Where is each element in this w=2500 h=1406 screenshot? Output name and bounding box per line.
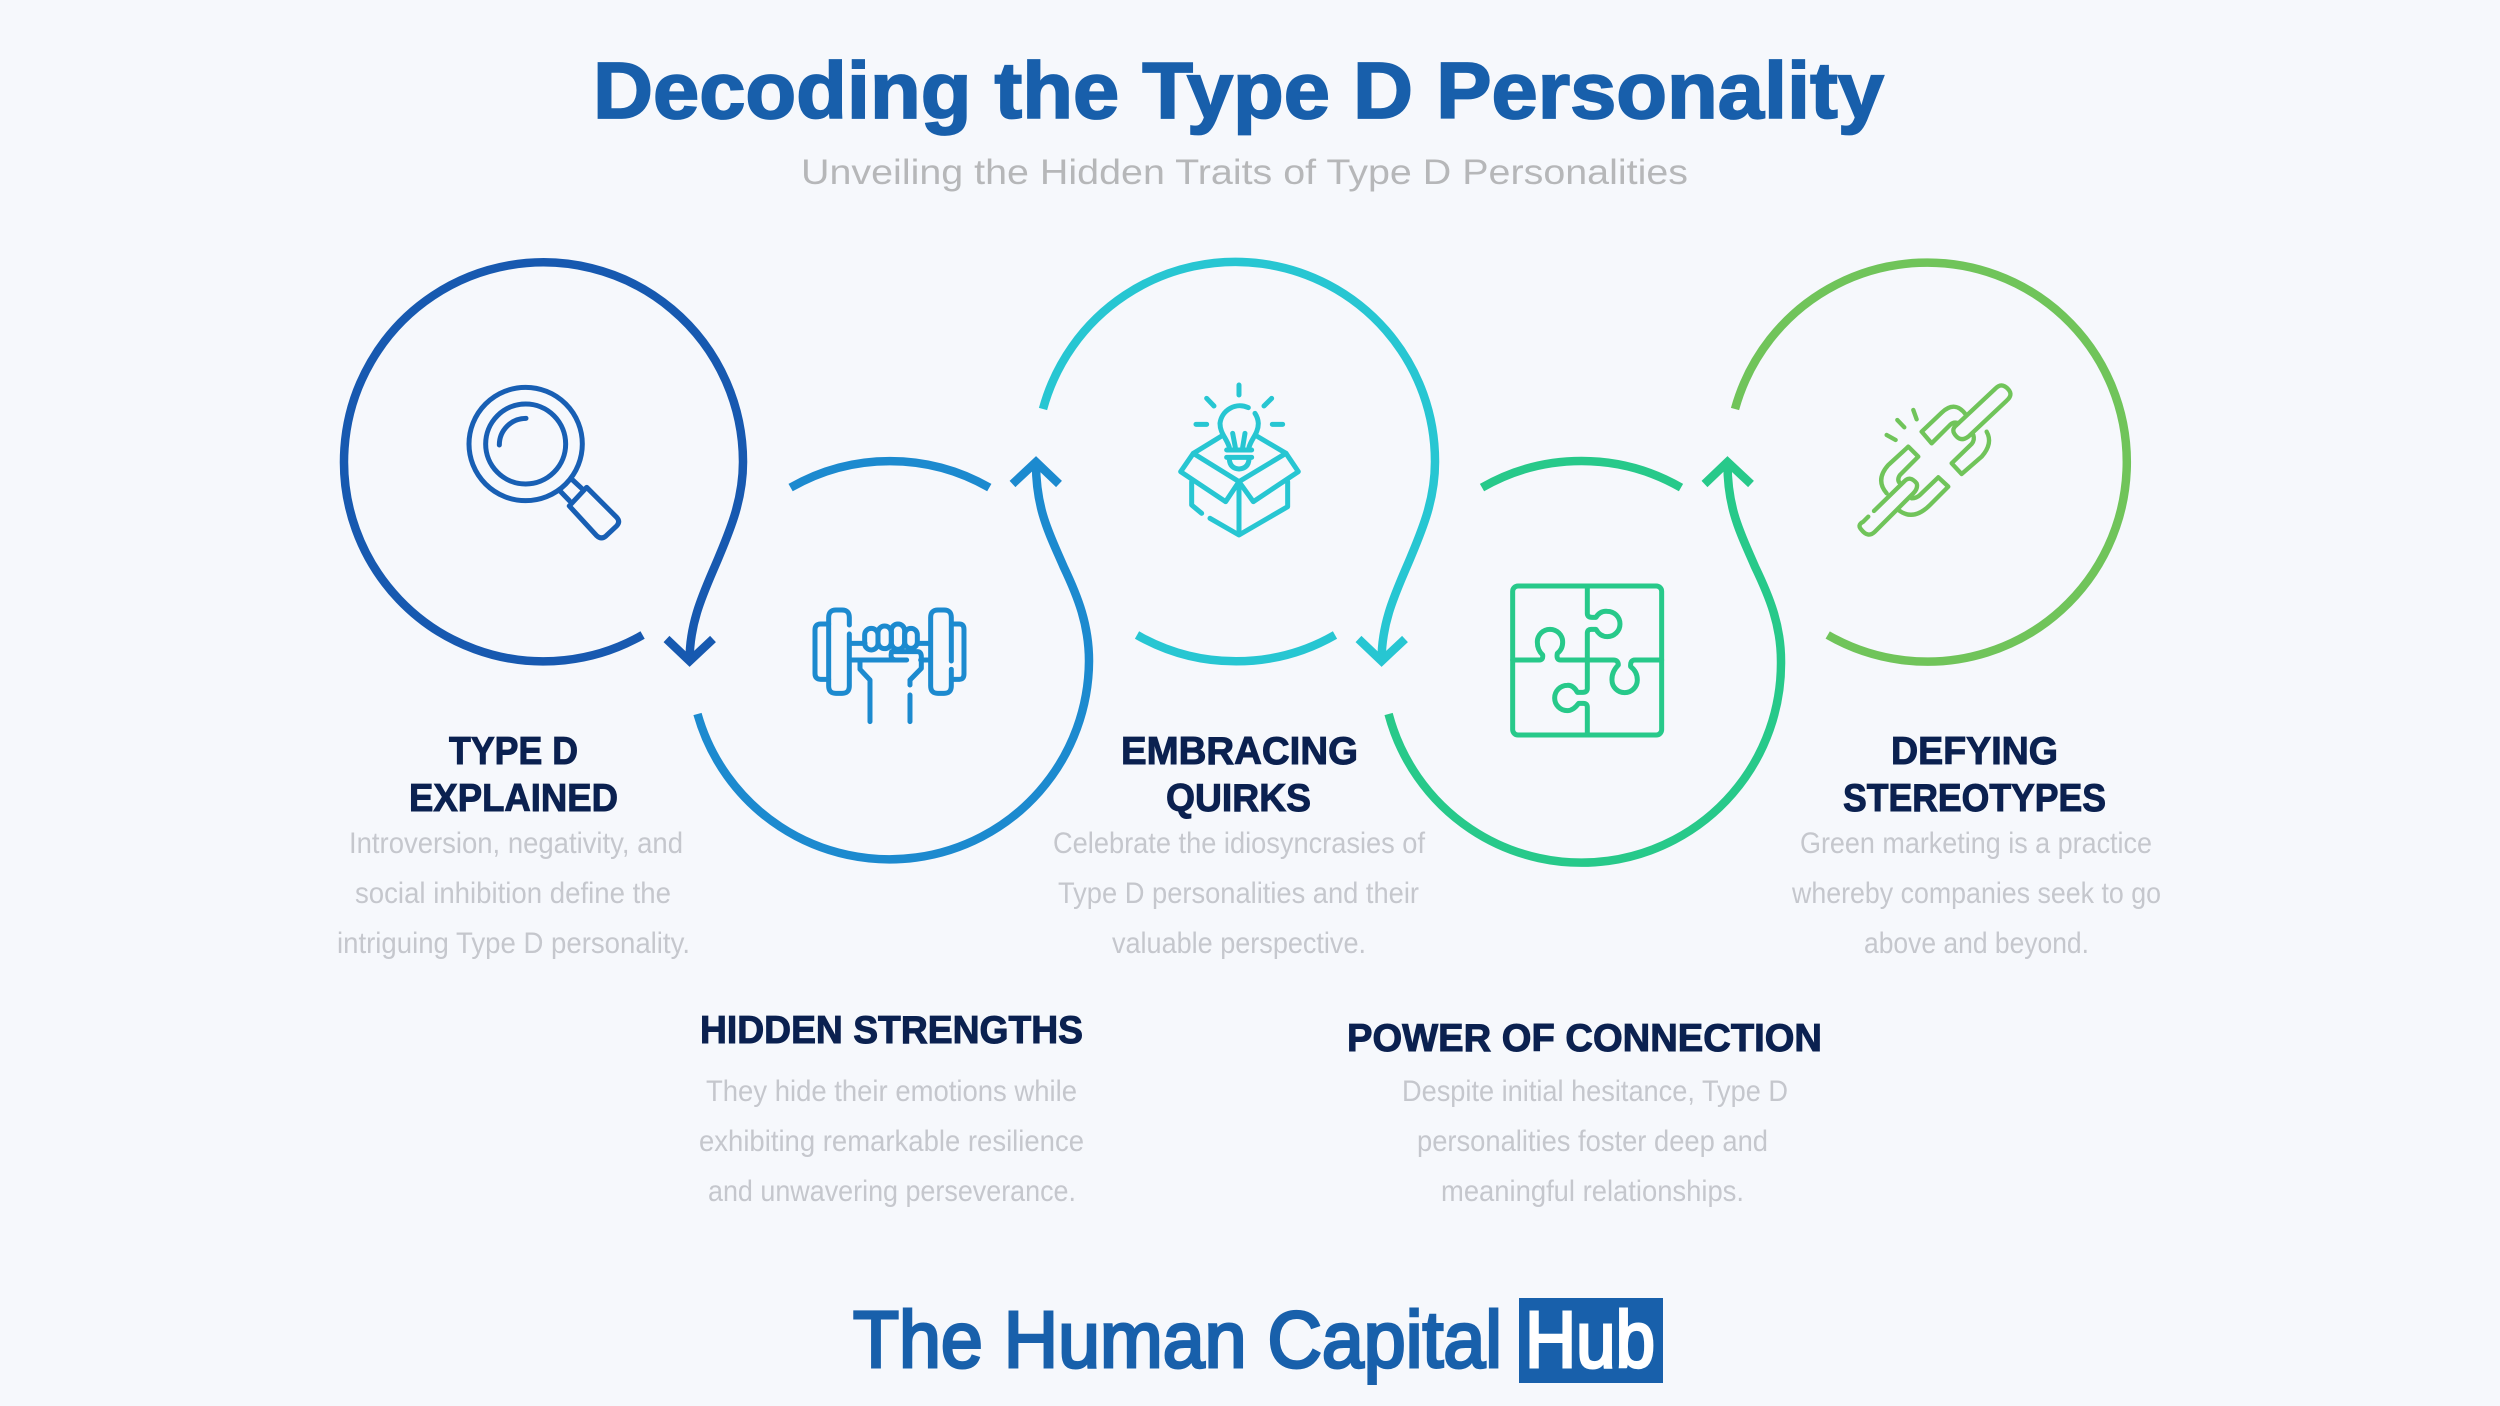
text block: Type D explained [337, 730, 690, 960]
icon: puzzle pieces [1513, 586, 1662, 735]
text block: Embracing quirks: Type D personalities and their [1058, 877, 1419, 910]
text block: Type D explained: Introversion, negativity, and [349, 827, 683, 860]
step 5 loop [1735, 263, 2127, 662]
text block: Power of connection: POWER OF CONNECTION [1347, 1017, 1822, 1060]
text block: Hidden strengths: They hide their emotions while [706, 1075, 1077, 1108]
text block: Type D explained: TYPE D [449, 730, 578, 773]
step 4 loop arrow [1389, 461, 1781, 863]
text block: Defying stereotypes: above and beyond. [1864, 927, 2089, 960]
subtitle: Unveiling the Hidden Traits of Type D Personalities [801, 153, 1688, 192]
text block: Power of connection: personalities foster deep and [1417, 1125, 1768, 1158]
title: Decoding the Type D Personality [593, 46, 1885, 135]
text block: Defying stereotypes [1791, 730, 2161, 960]
text block: Type D explained: intriguing Type D personality. [337, 927, 690, 960]
text block: Defying stereotypes: Green marketing is a practice [1800, 827, 2152, 860]
text block: Embracing quirks: Celebrate the idiosyncrasies of [1053, 827, 1426, 860]
text block: Hidden strengths: exhibiting remarkable resilience [699, 1125, 1084, 1158]
text block: Embracing quirks [1053, 730, 1426, 960]
step 2 loop arrow [698, 461, 1089, 859]
text block: Power of connection: Despite initial hesitance, Type D [1402, 1075, 1788, 1108]
icon: box with light bulb [1181, 385, 1298, 535]
logo: The Human Capital Hub: Hub [1525, 1295, 1655, 1384]
text block: Defying stereotypes: DEFYING [1891, 730, 2058, 773]
text block: Power of connection: meaningful relationships. [1441, 1175, 1744, 1208]
icon: broken chain [1860, 385, 2010, 535]
text block: Hidden strengths: HIDDEN STRENGTHS [700, 1009, 1083, 1052]
text block: Embracing quirks: QUIRKS [1166, 777, 1311, 820]
text block: Embracing quirks: valuable perspective. [1112, 927, 1366, 960]
icon: fist with dumbbell [815, 610, 964, 722]
text block: Defying stereotypes: STEREOTYPES [1843, 777, 2106, 820]
step 3 loop arrow [1043, 262, 1435, 661]
logo: The Human Capital Hub: The Human Capital [853, 1295, 1502, 1384]
step 1 loop arrow [344, 262, 743, 661]
text block: Power of connection [1347, 1017, 1822, 1208]
text block: Hidden strengths: and unwavering perseverance. [708, 1175, 1076, 1208]
text block: Type D explained: EXPLAINED [409, 777, 618, 820]
text block: Embracing quirks: EMBRACING [1121, 730, 1358, 773]
icon: magnifying glass [469, 387, 619, 538]
text block: Defying stereotypes: whereby companies seek to go [1791, 877, 2161, 910]
text block: Hidden strengths [699, 1009, 1084, 1208]
text block: Type D explained: social inhibition define the [355, 877, 671, 910]
